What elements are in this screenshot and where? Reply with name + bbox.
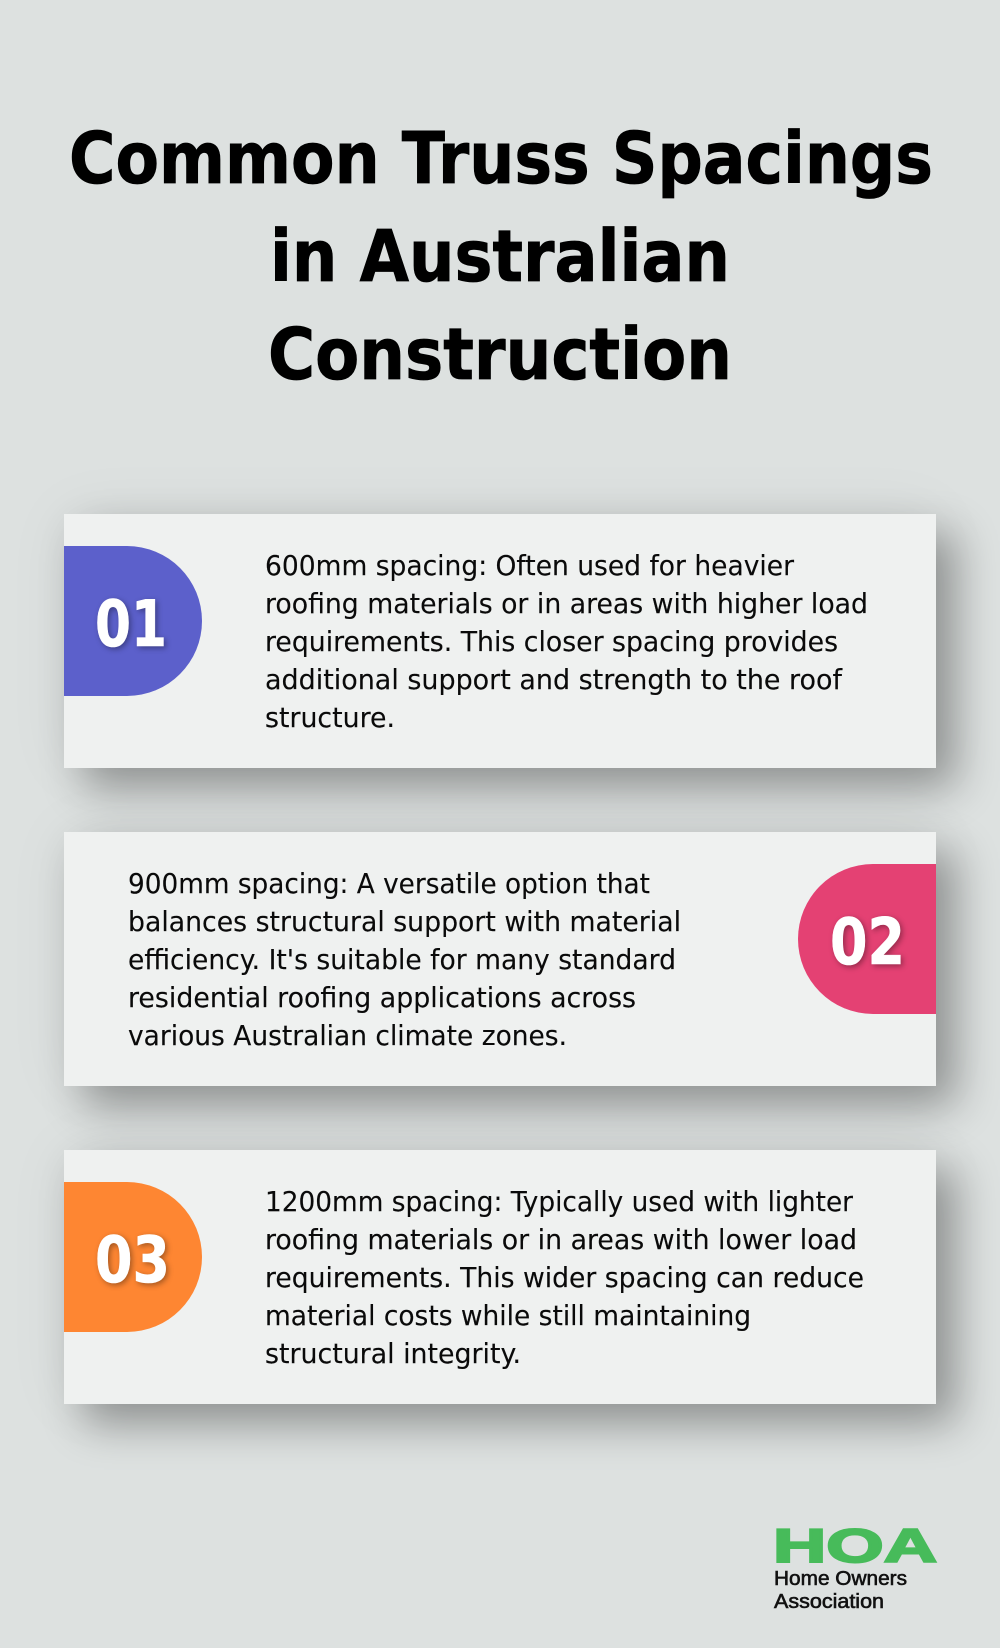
text block: 600mm spacing: requirements. This closer spacing provides: [265, 625, 838, 658]
text block: 600mm spacing: roofing materials or in areas with higher load: [265, 587, 868, 620]
panel: card 3 background: [64, 1150, 936, 1404]
number badge 03: 03: [95, 1224, 170, 1298]
text block: 1200mm spacing: requirements. This wider spacing can reduce: [265, 1261, 864, 1294]
text block: 1200mm spacing: material costs while still maintaining: [265, 1299, 751, 1332]
text block: 900mm spacing: residential roofing applications across: [128, 981, 636, 1014]
text block: 1200mm spacing: 1200mm spacing: Typically used with lighter: [265, 1185, 853, 1218]
text block: 600mm spacing: additional support and strength to the roof: [265, 663, 843, 696]
logo: HOA Home Owners Association: [773, 1519, 937, 1613]
title: Construction: [268, 313, 732, 396]
logo: HOA Home Owners Association: Association: [774, 1591, 884, 1613]
text block: 1200mm spacing: [265, 1185, 864, 1370]
number badge 01: 01: [95, 588, 167, 662]
text block: 900mm spacing: 900mm spacing: A versatile option that: [128, 867, 650, 900]
title: in Australian: [270, 215, 730, 298]
title: [69, 117, 933, 396]
text block: 900mm spacing: various Australian climate zones.: [128, 1019, 567, 1052]
text block: 600mm spacing: [265, 549, 868, 734]
logo: HOA Home Owners Association: HOA: [773, 1519, 937, 1572]
number badge 01: [64, 546, 202, 696]
text block: 1200mm spacing: structural integrity.: [265, 1337, 521, 1370]
text block: 600mm spacing: structure.: [265, 701, 395, 734]
text block: 600mm spacing: 600mm spacing: Often used for heavier: [265, 549, 794, 582]
logo: HOA Home Owners Association: Home Owners: [774, 1568, 907, 1590]
number badge 02: [798, 864, 936, 1014]
text block: 900mm spacing: [128, 867, 681, 1052]
text block: 900mm spacing: efficiency. It's suitable for many standard: [128, 943, 676, 976]
panel: card 2 background: [64, 832, 936, 1086]
text block: 1200mm spacing: roofing materials or in areas with lower load: [265, 1223, 857, 1256]
text block: 900mm spacing: balances structural support with material: [128, 905, 681, 938]
panel: card 1 background: [64, 514, 936, 768]
number badge 02: 02: [830, 906, 905, 980]
number badge 03: [64, 1182, 202, 1332]
